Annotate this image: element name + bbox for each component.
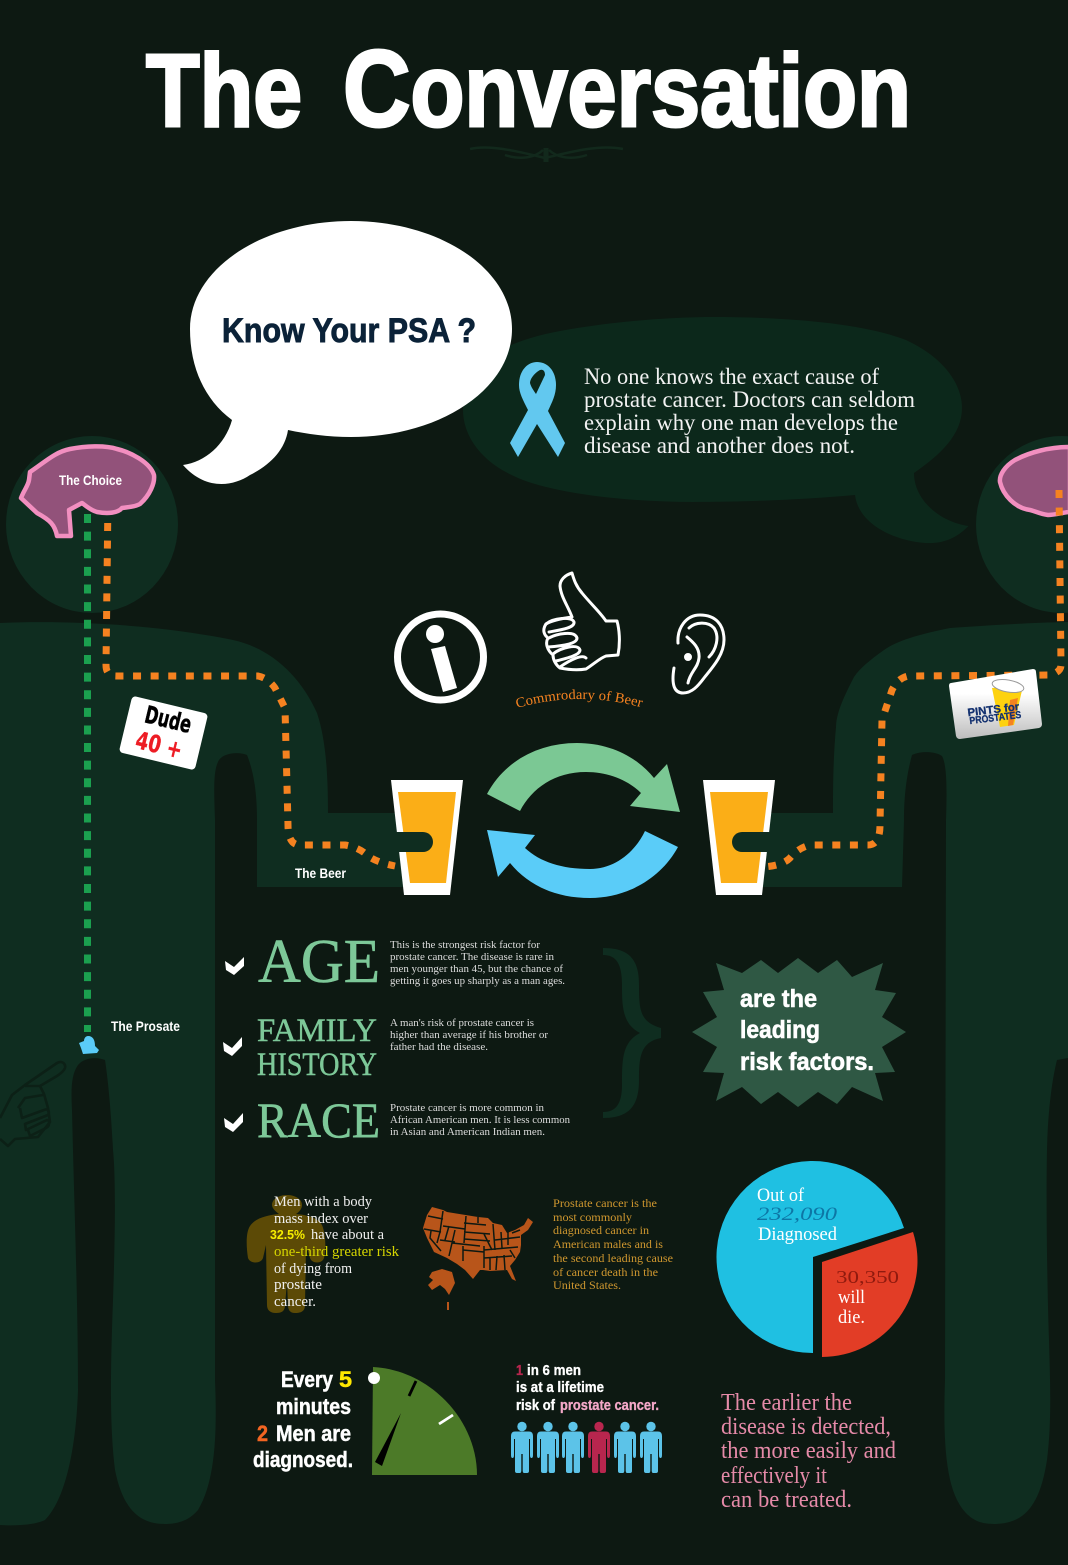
name tag: Dude 40+: [119, 696, 208, 770]
speech bubble: Know Your PSA: [183, 221, 512, 484]
bubble text: No one knows the exact cause of: [584, 364, 879, 389]
icon: prostate: [79, 1036, 99, 1054]
arrow: blue cycle: [487, 830, 678, 898]
text: most commonly diagnosed: the second leading cause: [553, 1251, 673, 1265]
1 in 6 men text: [516, 1363, 659, 1414]
obesity text: cancer.: [274, 1294, 316, 1310]
description: family history: higher than average if his brother or: [390, 1030, 549, 1041]
pint glass logo: [992, 686, 1023, 727]
right beer glass: [703, 780, 785, 895]
description: age: getting it goes up sharply as a man ages.: [390, 976, 565, 987]
tag text: Dude: [142, 701, 194, 739]
logo text: PINTS for: [967, 701, 1021, 719]
1 in 6 men text: is at a lifetime: [516, 1380, 604, 1396]
arrow: green cycle: [487, 743, 680, 812]
description: family history: father had the disease.: [390, 1042, 488, 1053]
label: The Prosate: The Prosate: [111, 1018, 180, 1034]
pie labels: [757, 1185, 899, 1328]
brace: [603, 948, 661, 1118]
heading: race: RACE: [257, 1092, 380, 1148]
title: Conversation: [343, 28, 911, 150]
obesity text: of dying from: [274, 1261, 352, 1277]
icon: ear: [673, 615, 724, 693]
pie labels: Out of: [757, 1185, 805, 1206]
text: most commonly diagnosed: Prostate cancer is the: [553, 1196, 657, 1210]
obesity text: one-third greater risk: [274, 1244, 399, 1260]
icon: check: [225, 957, 244, 975]
hawaii: [447, 1302, 449, 1310]
title: [146, 28, 911, 150]
closing text: early detection: The earlier the: [721, 1390, 852, 1416]
callout text: leading: [740, 1016, 820, 1044]
orange dotted line: right: [762, 490, 1061, 867]
obesity stat: [247, 1194, 399, 1313]
icon: pointing hand: [0, 1062, 65, 1146]
risk factor: family history: [223, 1013, 549, 1083]
right brain: [1000, 447, 1068, 515]
icon: check: [224, 1113, 243, 1132]
icon: thumbs up: [544, 573, 619, 670]
closing text: early detection: can be treated.: [721, 1487, 852, 1513]
orange dotted line: left: [106, 523, 395, 866]
obesity text: have about a: [311, 1227, 384, 1243]
map of the United States: [423, 1207, 533, 1310]
1 in 6 men text: risk of: [516, 1398, 555, 1414]
pie labels: 232,090: [757, 1204, 838, 1225]
risk factor: race: [224, 1092, 571, 1148]
bubble text: [584, 364, 915, 458]
icon: awareness ribbon: [510, 362, 565, 457]
pie labels: will: [838, 1287, 865, 1308]
pie slice: will die: [822, 1232, 917, 1357]
brain label: The Choice: [59, 472, 122, 488]
every 5 minutes text: Every: [281, 1367, 333, 1392]
closing text: early detection: [721, 1390, 896, 1513]
1 in 6 men text: 1: [516, 1363, 523, 1379]
tag text: [133, 700, 194, 765]
speech bubble: cause of prostate cancer: [463, 317, 968, 543]
description: age: prostate cancer. The disease is rare in: [390, 952, 555, 963]
text: most commonly diagnosed: United States.: [553, 1278, 621, 1292]
tag text: 40 +: [133, 726, 185, 764]
clock needle: [375, 1413, 401, 1466]
bubble text: prostate cancer. Doctors can seldom: [584, 387, 915, 412]
heading: family history: HISTORY: [257, 1047, 377, 1083]
bubble heading: Know Your PSA ?: [222, 312, 476, 350]
heading: age: AGE: [258, 928, 380, 996]
description: age: men younger than 45, but the chance of: [390, 964, 564, 975]
obesity text: mass index over: [274, 1211, 368, 1227]
obesity text: 32.5%: [270, 1227, 305, 1242]
obesity text: prostate: [274, 1277, 322, 1293]
every 5 minutes text: 5: [339, 1367, 352, 1392]
obesity text: [270, 1194, 399, 1310]
title ornament: [470, 147, 623, 162]
closing text: early detection: the more easily and: [721, 1438, 896, 1464]
name tag: Pints for Prostates: [949, 669, 1042, 739]
label: The Beer: The Beer: [295, 865, 346, 881]
heading: family history: [257, 1013, 377, 1083]
description: race: Prostate cancer is more common in: [390, 1103, 545, 1114]
text: most commonly diagnosed: diagnosed cancer in: [553, 1223, 649, 1237]
description: race: in Asian and American Indian men.: [390, 1127, 545, 1138]
caption: Commrodary of Beer: Commrodary of Beer: [516, 689, 643, 707]
closing text: early detection: disease is detected,: [721, 1414, 891, 1440]
right figure silhouette: [760, 436, 1068, 1524]
left beer glass: [385, 780, 463, 895]
bubble text: disease and another does not.: [584, 433, 855, 458]
1 in 6 men text: prostate cancer.: [560, 1398, 659, 1414]
hand holding glass: [732, 832, 785, 852]
alaska: [428, 1269, 455, 1295]
left brain: [21, 446, 154, 536]
obesity text: Men with a body: [274, 1194, 372, 1210]
icon: overweight silhouette: [247, 1195, 325, 1313]
description: age: [390, 940, 565, 987]
description: race: [390, 1103, 571, 1138]
pie labels: 30,350: [836, 1267, 899, 1287]
callout text: [740, 985, 874, 1076]
pie chart: [716, 1161, 917, 1357]
every 5 minutes text: minutes: [276, 1394, 351, 1419]
logo text: [967, 701, 1022, 727]
pictogram: six men: [511, 1422, 662, 1473]
risk factor: age: [225, 928, 565, 996]
starburst callout: [692, 958, 906, 1107]
description: family history: [390, 1018, 549, 1053]
heading: family history: FAMILY: [257, 1013, 377, 1049]
icon: information: [398, 614, 484, 700]
pie slice: diagnosed: [716, 1161, 904, 1353]
closing text: early detection: effectively it: [721, 1463, 827, 1489]
description: race: African American men. It is less common: [390, 1115, 571, 1126]
hand holding glass: [385, 832, 433, 852]
pie labels: die.: [838, 1307, 865, 1328]
left figure silhouette: [0, 436, 410, 1525]
logo text: PROSTATES: [969, 710, 1022, 727]
text: most commonly diagnosed: of cancer death in the: [553, 1265, 658, 1279]
text: most commonly diagnosed: American males and is: [553, 1237, 663, 1251]
text: most commonly diagnosed: most commonly: [553, 1210, 632, 1224]
bubble text: explain why one man develops the: [584, 410, 898, 435]
description: family history: A man's risk of prostate cancer is: [390, 1018, 534, 1029]
title: The: [146, 33, 302, 148]
pie labels: Diagnosed: [758, 1224, 837, 1245]
every 5 minutes text: Men are: [276, 1421, 351, 1446]
icon: check: [223, 1037, 242, 1056]
text: most commonly diagnosed: [553, 1196, 673, 1292]
every 5 minutes text: diagnosed.: [253, 1447, 353, 1472]
description: age: This is the strongest risk factor for: [390, 940, 541, 951]
every 5 minutes text: [253, 1367, 353, 1472]
green dotted line: the prostate path: [84, 514, 91, 1032]
callout text: risk factors.: [740, 1048, 874, 1076]
every 5 minutes text: 2: [257, 1421, 268, 1446]
callout text: are the: [740, 985, 817, 1013]
1 in 6 men text: in 6 men: [527, 1363, 581, 1379]
clock chart: [368, 1367, 477, 1475]
